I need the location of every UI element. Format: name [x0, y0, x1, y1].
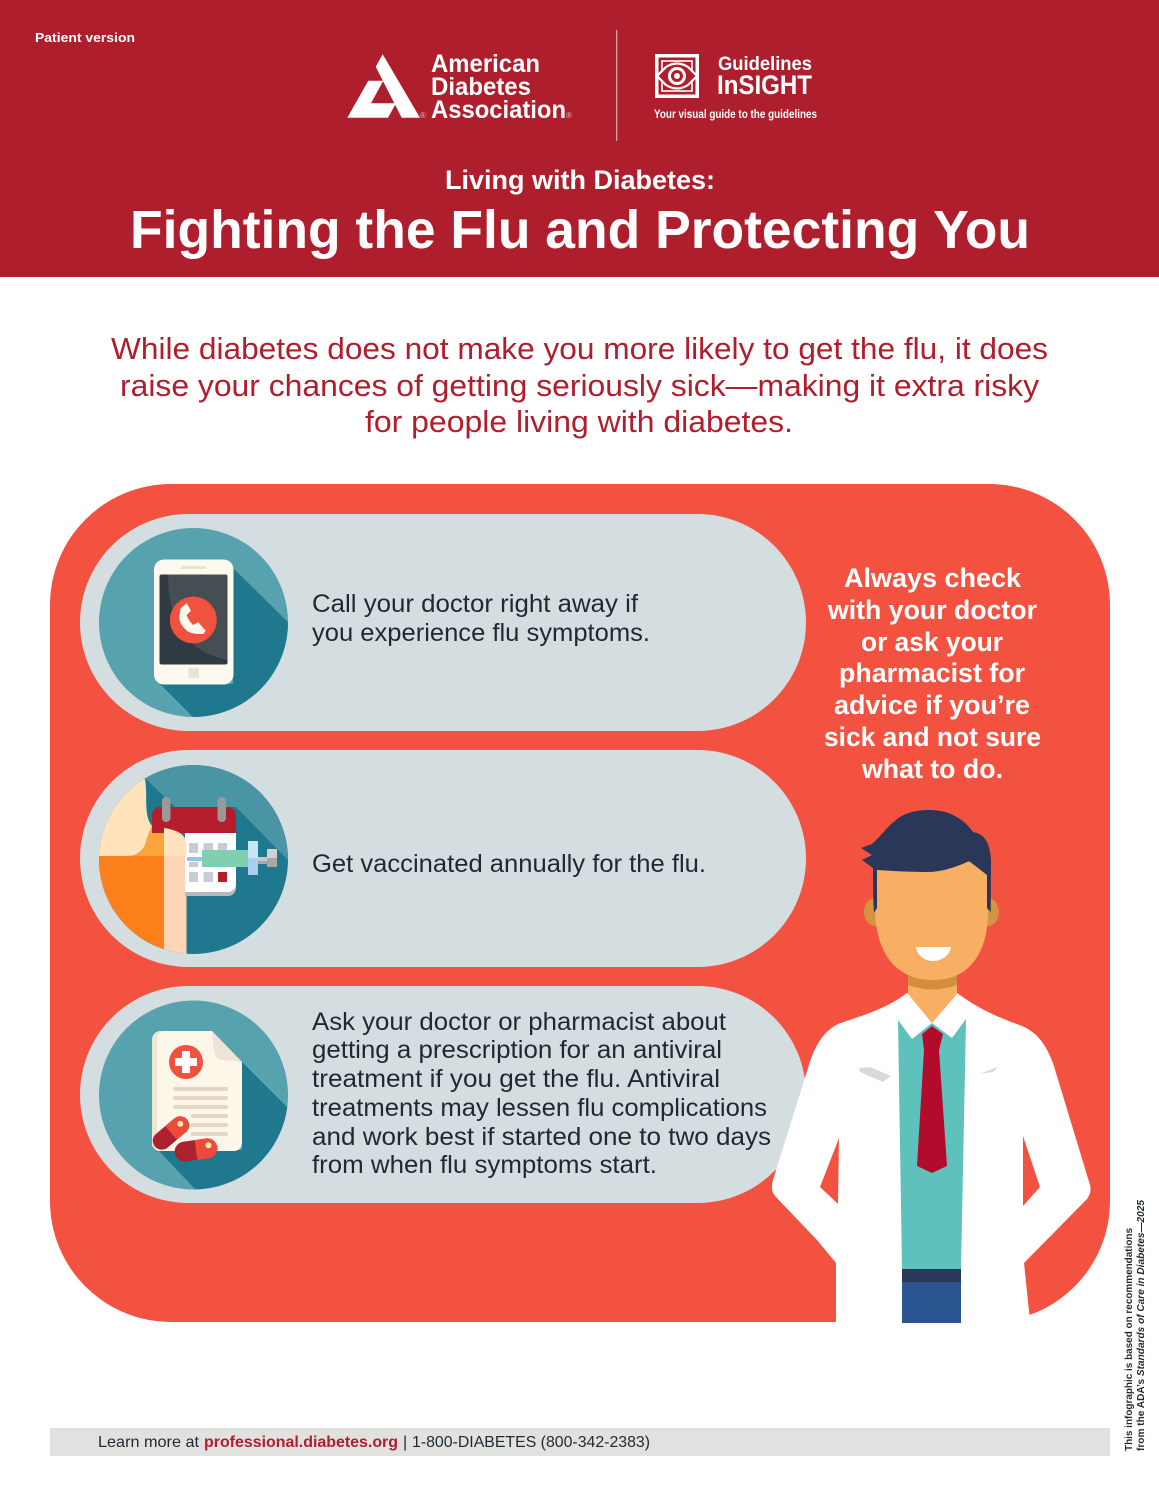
- illustration: smiling doctor: [772, 810, 1091, 1330]
- Guidelines InSIGHT logo: Your visual guide to the guidelines: [654, 109, 817, 121]
- footer bar: [50, 1428, 1110, 1456]
- intro statement: for people living with diabetes.: [365, 404, 793, 439]
- hair: [861, 810, 991, 913]
- source note: from the ADA’s Standards of Care in Diabetes—2025: [1135, 1200, 1147, 1451]
- American Diabetes Association logo: American: [431, 50, 540, 78]
- doctor white coat: [772, 993, 1091, 1330]
- text: antiviral advice: treatments may lessen flu complications: [312, 1094, 767, 1122]
- panel: get vaccinated: [80, 750, 806, 967]
- ears: [864, 898, 999, 926]
- face: [875, 862, 988, 980]
- text: antiviral advice: from when flu symptoms start.: [312, 1151, 657, 1179]
- text: antiviral advice: treatment if you get the flu. Antiviral: [312, 1065, 720, 1093]
- American Diabetes Association logo: [347, 50, 572, 124]
- smile: [916, 947, 951, 961]
- American Diabetes Association logo: Association: [431, 96, 566, 124]
- patient version label: Patient version: [35, 30, 135, 45]
- Guidelines InSIGHT logo: InSIGHT: [717, 70, 812, 100]
- callout: always check with your doctor: or ask your: [861, 627, 1003, 657]
- callout: always check with your doctor: sick and not sure: [824, 722, 1041, 752]
- coat pockets: [859, 1067, 998, 1082]
- text: call doctor: you experience flu symptoms.: [312, 619, 650, 647]
- intro statement: While diabetes does not make you more likely to get the flu, it does: [111, 331, 1048, 366]
- text: antiviral advice: [312, 1008, 771, 1179]
- callout: always check with your doctor: with your doctor: [827, 595, 1037, 625]
- trousers: [902, 1282, 961, 1323]
- Guidelines InSIGHT logo: [654, 54, 817, 121]
- callout: always check with your doctor: Always check: [844, 563, 1022, 593]
- intro statement: [111, 331, 1048, 439]
- footer text: [98, 1434, 650, 1451]
- header band: [0, 0, 1159, 277]
- callout: always check with your doctor: advice if you’re: [834, 690, 1030, 720]
- intro statement: raise your chances of getting seriously sick—making it extra risky: [120, 368, 1040, 403]
- text: antiviral advice: and work best if started one to two days: [312, 1123, 771, 1151]
- text: call doctor: Call your doctor right away if: [312, 590, 638, 618]
- coat arm gaps: [820, 1136, 1040, 1206]
- icon: prescription and pills: [99, 1000, 288, 1190]
- callout: always check with your doctor: [824, 563, 1041, 784]
- icon: smartphone with call symbol: [99, 528, 288, 717]
- text: antiviral advice: getting a prescription for an antiviral: [312, 1036, 722, 1064]
- logo divider: [616, 30, 617, 141]
- neck: [908, 965, 957, 1023]
- source note: This infographic is based on recommendations: [1123, 1228, 1135, 1451]
- text: vaccination: Get vaccinated annually for the flu.: [312, 850, 706, 878]
- American Diabetes Association logo: ®: [420, 111, 426, 120]
- subtitle: Living with Diabetes:: [445, 165, 715, 195]
- tie: [917, 1026, 947, 1173]
- collar: [898, 994, 966, 1039]
- red background panel: [50, 484, 1110, 1322]
- source note: [1123, 1200, 1147, 1451]
- American Diabetes Association logo: ®: [566, 111, 572, 120]
- callout: always check with your doctor: pharmacist for: [839, 658, 1025, 688]
- title: Fighting the Flu and Protecting You: [130, 200, 1030, 260]
- American Diabetes Association logo: Diabetes: [431, 73, 531, 101]
- callout: always check with your doctor: what to do.: [861, 754, 1003, 784]
- panel: call your doctor: [80, 514, 806, 740]
- footer text: Learn more at: [98, 1434, 200, 1451]
- footer text: |: [403, 1434, 407, 1451]
- belt: [902, 1269, 961, 1282]
- icon: shoulder, syringe and calendar: [99, 765, 288, 954]
- text: antiviral advice: Ask your doctor or pharmacist about: [312, 1008, 726, 1036]
- Guidelines InSIGHT logo: Guidelines: [718, 54, 812, 75]
- footer text: 1-800-DIABETES (800-342-2383): [412, 1434, 650, 1451]
- footer text: professional.diabetes.org: [204, 1434, 398, 1451]
- panel: antiviral prescription: [80, 986, 806, 1203]
- text: call doctor: [312, 590, 650, 647]
- shirt: [898, 1019, 966, 1269]
